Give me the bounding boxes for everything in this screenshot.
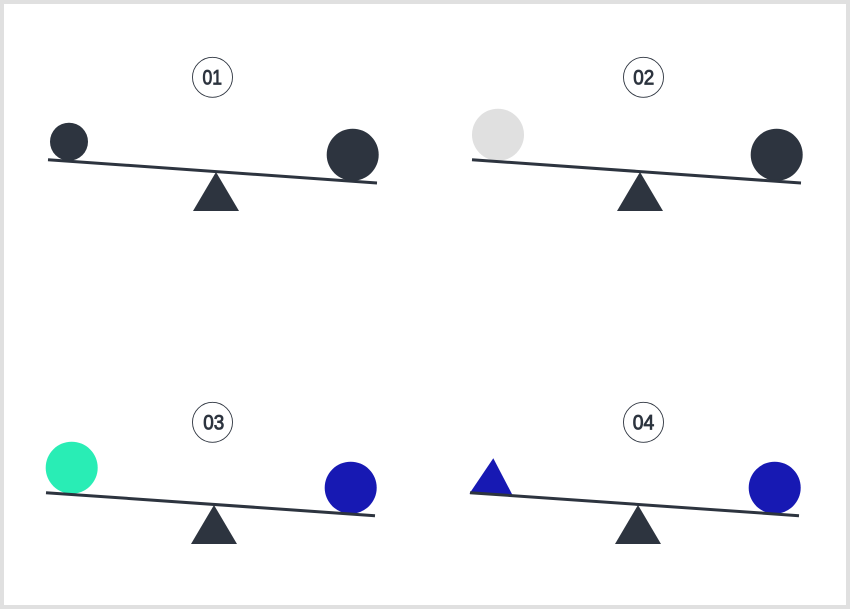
number badge 02: 02 bbox=[633, 66, 654, 89]
number badge 01: 01 bbox=[203, 66, 222, 89]
panel: seesaw 03 bbox=[46, 402, 377, 544]
number badge 03 bbox=[192, 402, 232, 442]
beam bbox=[46, 493, 375, 516]
fulcrum bbox=[193, 172, 239, 211]
number badge 01 bbox=[192, 57, 232, 97]
large blue circle bbox=[749, 462, 801, 514]
light grey circle bbox=[472, 109, 524, 161]
mint circle bbox=[46, 442, 98, 494]
beam bbox=[48, 160, 377, 183]
number badge 02 bbox=[624, 57, 664, 97]
large dark circle bbox=[751, 129, 803, 181]
beam bbox=[470, 493, 799, 516]
fulcrum bbox=[617, 172, 663, 211]
number badge 03: 03 bbox=[203, 411, 224, 434]
large blue circle bbox=[325, 462, 377, 514]
panel: seesaw 01 bbox=[48, 57, 379, 211]
panel: seesaw 02 bbox=[472, 57, 803, 211]
fulcrum bbox=[191, 505, 237, 544]
panel: seesaw 04 bbox=[470, 402, 801, 544]
large dark circle bbox=[327, 129, 379, 181]
small dark circle bbox=[50, 123, 88, 161]
number badge 04: 04 bbox=[633, 411, 655, 434]
blue triangle bbox=[470, 458, 513, 496]
beam bbox=[472, 160, 801, 183]
number badge 04 bbox=[624, 402, 664, 442]
fulcrum bbox=[615, 505, 661, 544]
